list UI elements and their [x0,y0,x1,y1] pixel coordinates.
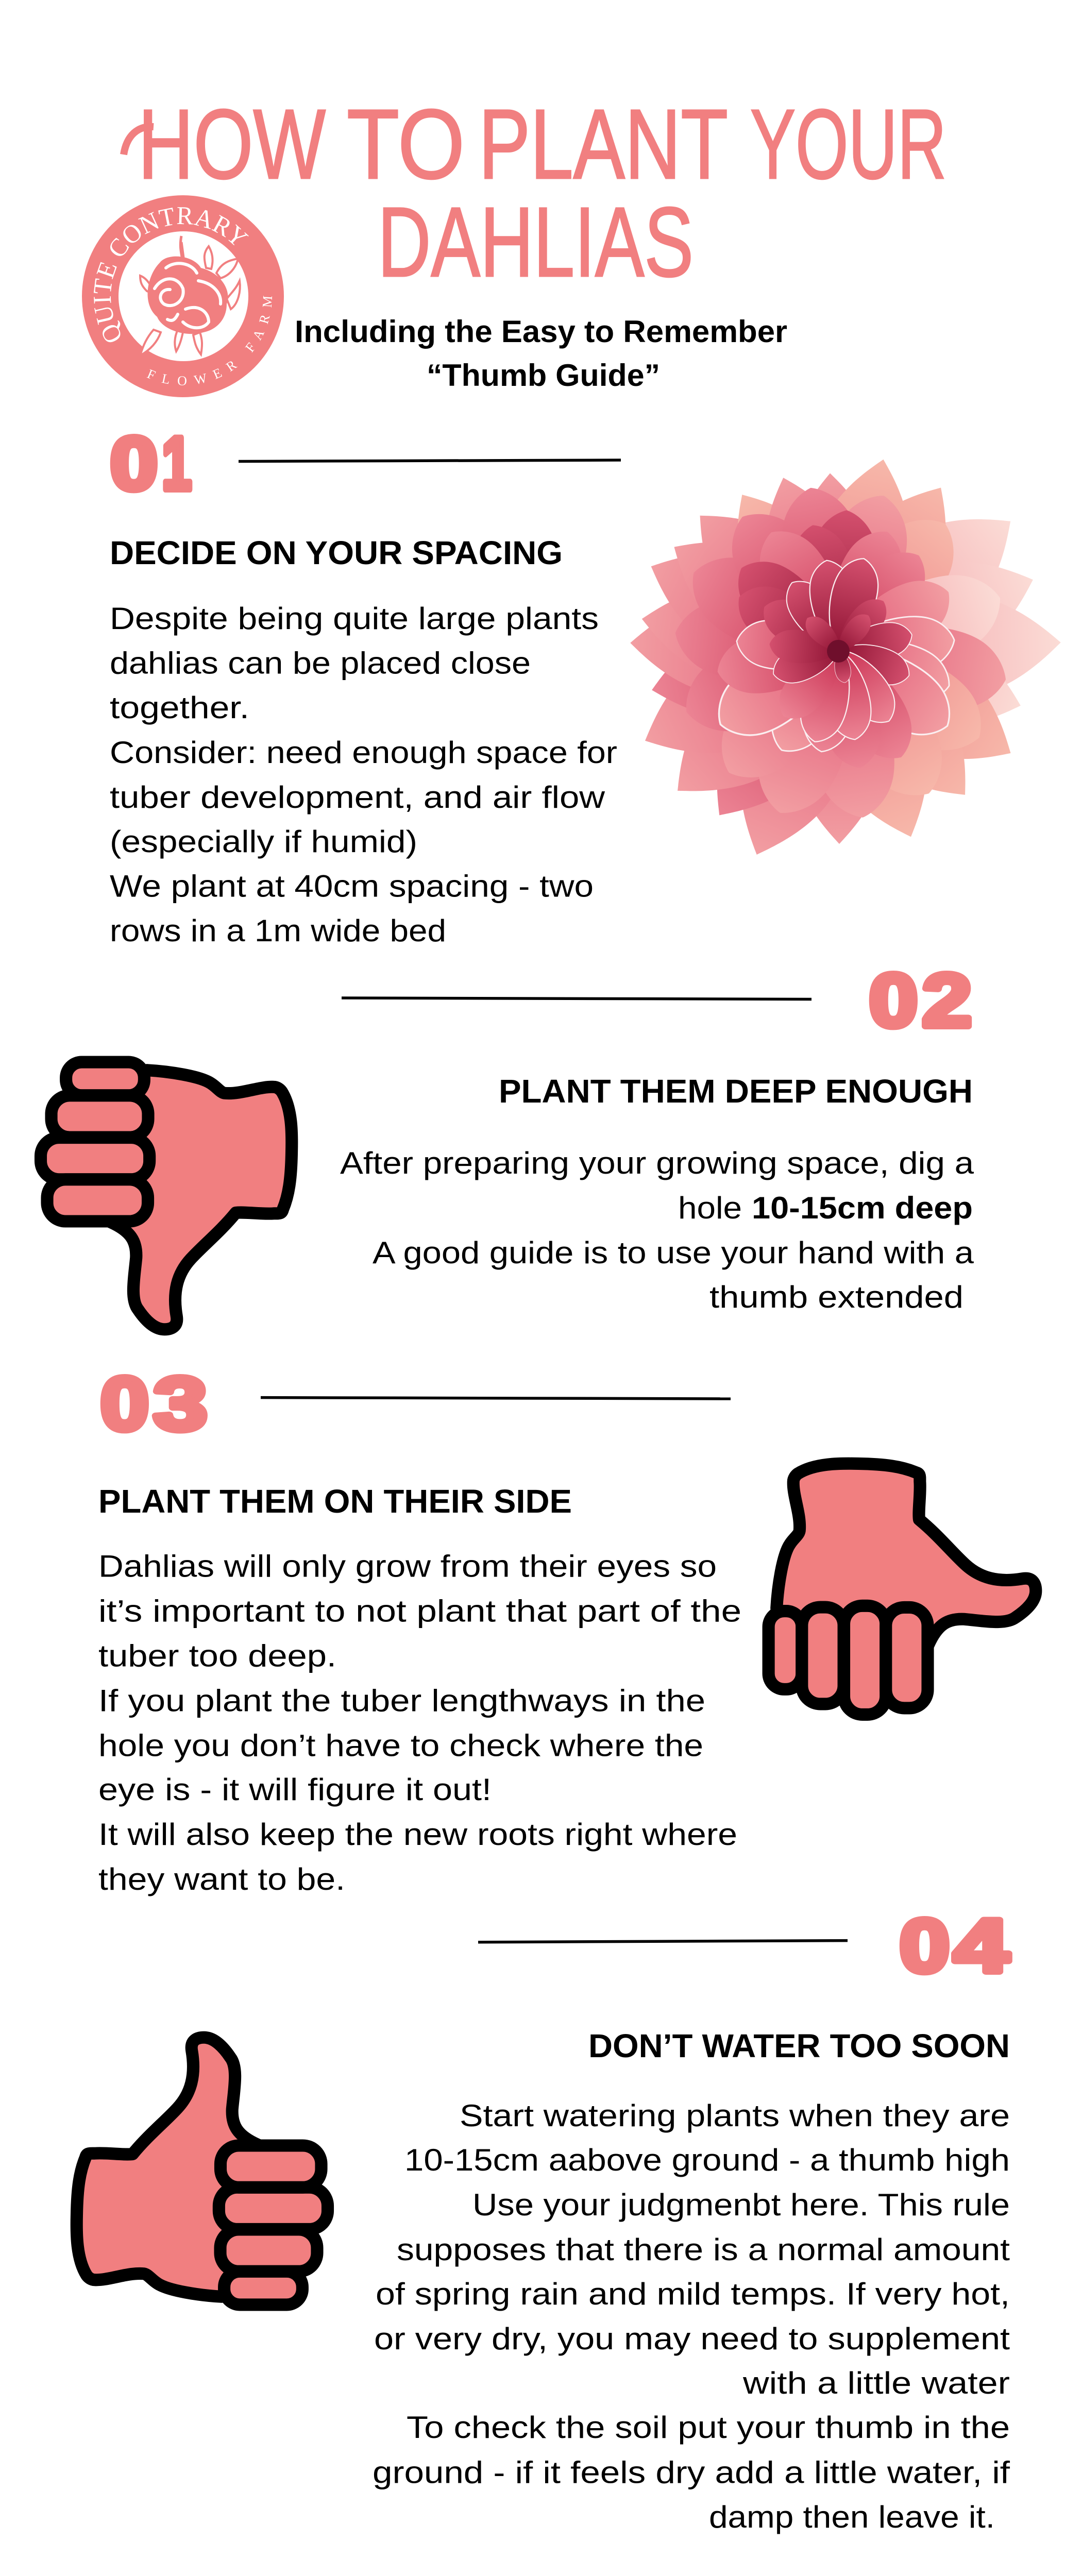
text block: step 1 body: together. [110,690,249,725]
title: YOUR [750,89,946,199]
title [124,89,946,297]
text block: step 1 body: Despite being quite large plants [110,601,599,636]
text block: step 3 body: If you plant the tuber lengthways in the [98,1684,705,1718]
text block: step 3 body: eye is - it will figure it out! [98,1772,492,1807]
text block: step 1 body: dahlias can be placed close [110,646,531,680]
title: DAHLIAS [378,187,694,297]
text block: step 1 body: We plant at 40cm spacing - two [110,869,594,904]
number 04 [900,1904,1009,1988]
logo text: FLOWER FARM: FLOWER FARM [146,296,272,385]
icon: thumb up [77,2038,328,2304]
text block: step 4 body: Use your judgmenbt here. This rule [472,2188,1010,2222]
text block: step 2 body: 10-15cm deep [752,1191,973,1225]
text block: step 3 body: it’s important to not plant that part of the [98,1594,741,1628]
heading: step 2: PLANT THEM DEEP ENOUGH [499,1073,973,1110]
number 04: 0 [900,1904,950,1988]
text block: step 1 body: Consider: need enough space for [110,735,617,770]
text block: step 4 body: Start watering plants when they are [460,2098,1010,2133]
text block: step 4 body: damp then leave it. [709,2500,995,2534]
text block: step 2 body: After preparing your growing space, dig a [340,1146,974,1180]
heading: step 3: PLANT THEM ON THEIR SIDE [98,1483,572,1520]
text block: step 2 body: thumb extended [709,1280,963,1314]
text block: step 2 body: A good guide is to use your hand with a [373,1235,974,1270]
subtitle [295,314,787,393]
text block: step 1 body [110,601,617,948]
text block: step 4 body [373,2098,1010,2534]
icon: dahlia flower [624,449,1062,874]
number 02: 2 [922,958,972,1042]
text block: step 1 body: rows in a 1m wide bed [110,913,446,948]
number 01 [110,421,192,505]
logo text: QUITE CONTRARY: QUITE CONTRARY [94,207,249,342]
number 01: 0 [110,421,158,505]
text block: step 3 body: hole you don’t have to check where the [98,1728,703,1763]
text block: step 4 body: or very dry, you may need to supplement [374,2321,1010,2356]
icon: rose [140,236,240,355]
text block: step 3 body: It will also keep the new roots right where [98,1817,737,1852]
number 02: 0 [869,958,918,1042]
number 02 [869,958,972,1042]
text block: step 1 body: (especially if humid) [110,824,417,859]
icon: thumb down [41,1062,292,1329]
number 03: 3 [154,1362,207,1446]
number 03: 0 [100,1362,149,1446]
title: HOW [138,89,326,199]
number 03 [100,1362,207,1446]
panel: step 1 [110,534,617,948]
subtitle: Including the Easy to Remember [295,314,787,349]
icon: thumb sideways [769,1464,1036,1715]
heading: step 1: DECIDE ON YOUR SPACING [110,534,563,571]
text block: step 4 body: ground - if it feels dry add a little water, if [373,2455,1010,2489]
text block: step 4 body: of spring rain and mild temps. If very hot, [376,2277,1010,2311]
title: PLANT [479,89,728,199]
text block: step 3 body: Dahlias will only grow from their eyes so [98,1549,717,1584]
panel: step 3 [98,1483,741,1896]
text block: step 3 body: tuber too deep. [98,1638,336,1673]
number 01: 1 [162,421,192,505]
text block: step 4 body: 10-15cm aabove ground - a thumb high [404,2143,1010,2177]
text block: step 4 body: supposes that there is a normal amount [397,2232,1010,2267]
panel: step 4 [373,2027,1010,2534]
text block: step 1 body: tuber development, and air flow [110,780,605,815]
text block: step 2 body: hole [678,1191,742,1225]
logo: Quite Contrary Flower Farm [82,195,284,397]
text block: step 3 body: they want to be. [98,1862,345,1896]
text block: step 2 body [340,1146,974,1314]
text block: step 3 body [98,1549,741,1896]
subtitle: “Thumb Guide” [427,358,660,393]
panel: step 2 [340,1073,974,1314]
heading: step 4: DON’T WATER TOO SOON [588,2027,1010,2064]
number 04: 4 [954,1904,1009,1988]
text block: step 4 body: To check the soil put your thumb in the [407,2410,1010,2445]
title: TO [347,89,465,199]
text block: step 4 body: with a little water [742,2366,1010,2400]
